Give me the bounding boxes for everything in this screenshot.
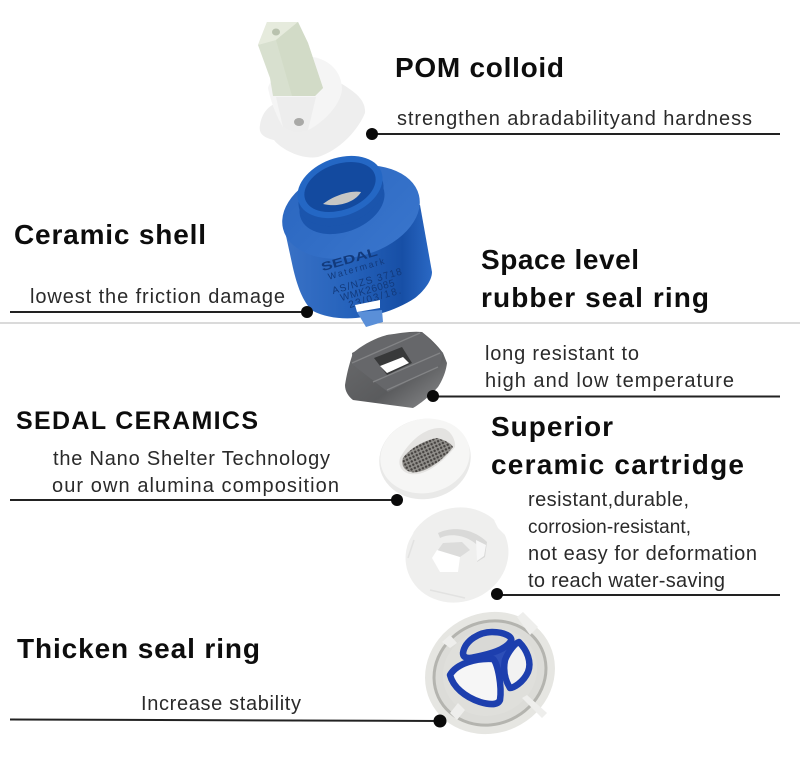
callout: Ceramic shell: lowest the friction damage <box>30 286 285 308</box>
callout: temperature resistance: high and low temperature <box>485 370 734 392</box>
callout: SEDAL CERAMICS: SEDAL CERAMICS <box>16 407 258 435</box>
callout: Superior ceramic cartridge <box>491 411 780 600</box>
heading: Space level rubber seal ring: Space level <box>481 244 639 275</box>
callout: Superior ceramic cartridge: to reach water-saving <box>528 570 725 592</box>
shell engraving: SEDAL <box>319 245 379 274</box>
callout: Superior ceramic cartridge: Superior <box>491 411 613 442</box>
callout: Ceramic shell <box>10 219 313 318</box>
callout: SEDAL CERAMICS <box>10 407 403 506</box>
component: grey rubber seal ring <box>345 332 447 408</box>
callout: SEDAL CERAMICS: the Nano Shelter Technology <box>53 448 330 470</box>
heading: Space level rubber seal ring: rubber seal ring <box>481 282 709 313</box>
component: superior ceramic cartridge disc with mesh <box>372 410 478 508</box>
callout: Thicken seal ring <box>10 633 446 728</box>
callout: Superior ceramic cartridge: corrosion-resistant, <box>528 517 691 538</box>
callout: temperature resistance <box>427 343 780 402</box>
shell engraving: 23/03/18. <box>347 286 402 311</box>
callout: Thicken seal ring: Thicken seal ring <box>17 633 260 664</box>
callout: Ceramic shell: Ceramic shell <box>14 219 206 250</box>
shell engraving: AS/NZS 3718 <box>331 266 404 297</box>
component: blue thicken seal ring <box>405 591 575 755</box>
component: POM colloid part <box>258 22 365 157</box>
shell engraving <box>319 240 409 315</box>
callout: POM colloid <box>366 52 780 140</box>
component: white ceramic disc <box>392 493 522 617</box>
shell engraving: WMK26085 <box>339 278 397 304</box>
component: blue ceramic shell <box>272 145 432 327</box>
heading: Space level rubber seal ring <box>481 244 709 313</box>
horizontal divider <box>0 322 800 324</box>
callout: POM colloid: strengthen abradabilityand hardness <box>397 108 752 130</box>
callout: Superior ceramic cartridge: resistant,durable, <box>528 489 689 511</box>
shell engraving: Watermark <box>327 256 386 282</box>
callout: Superior ceramic cartridge: ceramic cartridge <box>491 449 744 480</box>
callout: Superior ceramic cartridge: not easy for deformation <box>528 543 757 565</box>
callout: POM colloid: POM colloid <box>395 52 564 83</box>
callout: temperature resistance: long resistant to <box>485 343 639 365</box>
callout: Thicken seal ring: Increase stability <box>141 693 301 715</box>
callout: SEDAL CERAMICS: our own alumina composition <box>52 475 339 497</box>
